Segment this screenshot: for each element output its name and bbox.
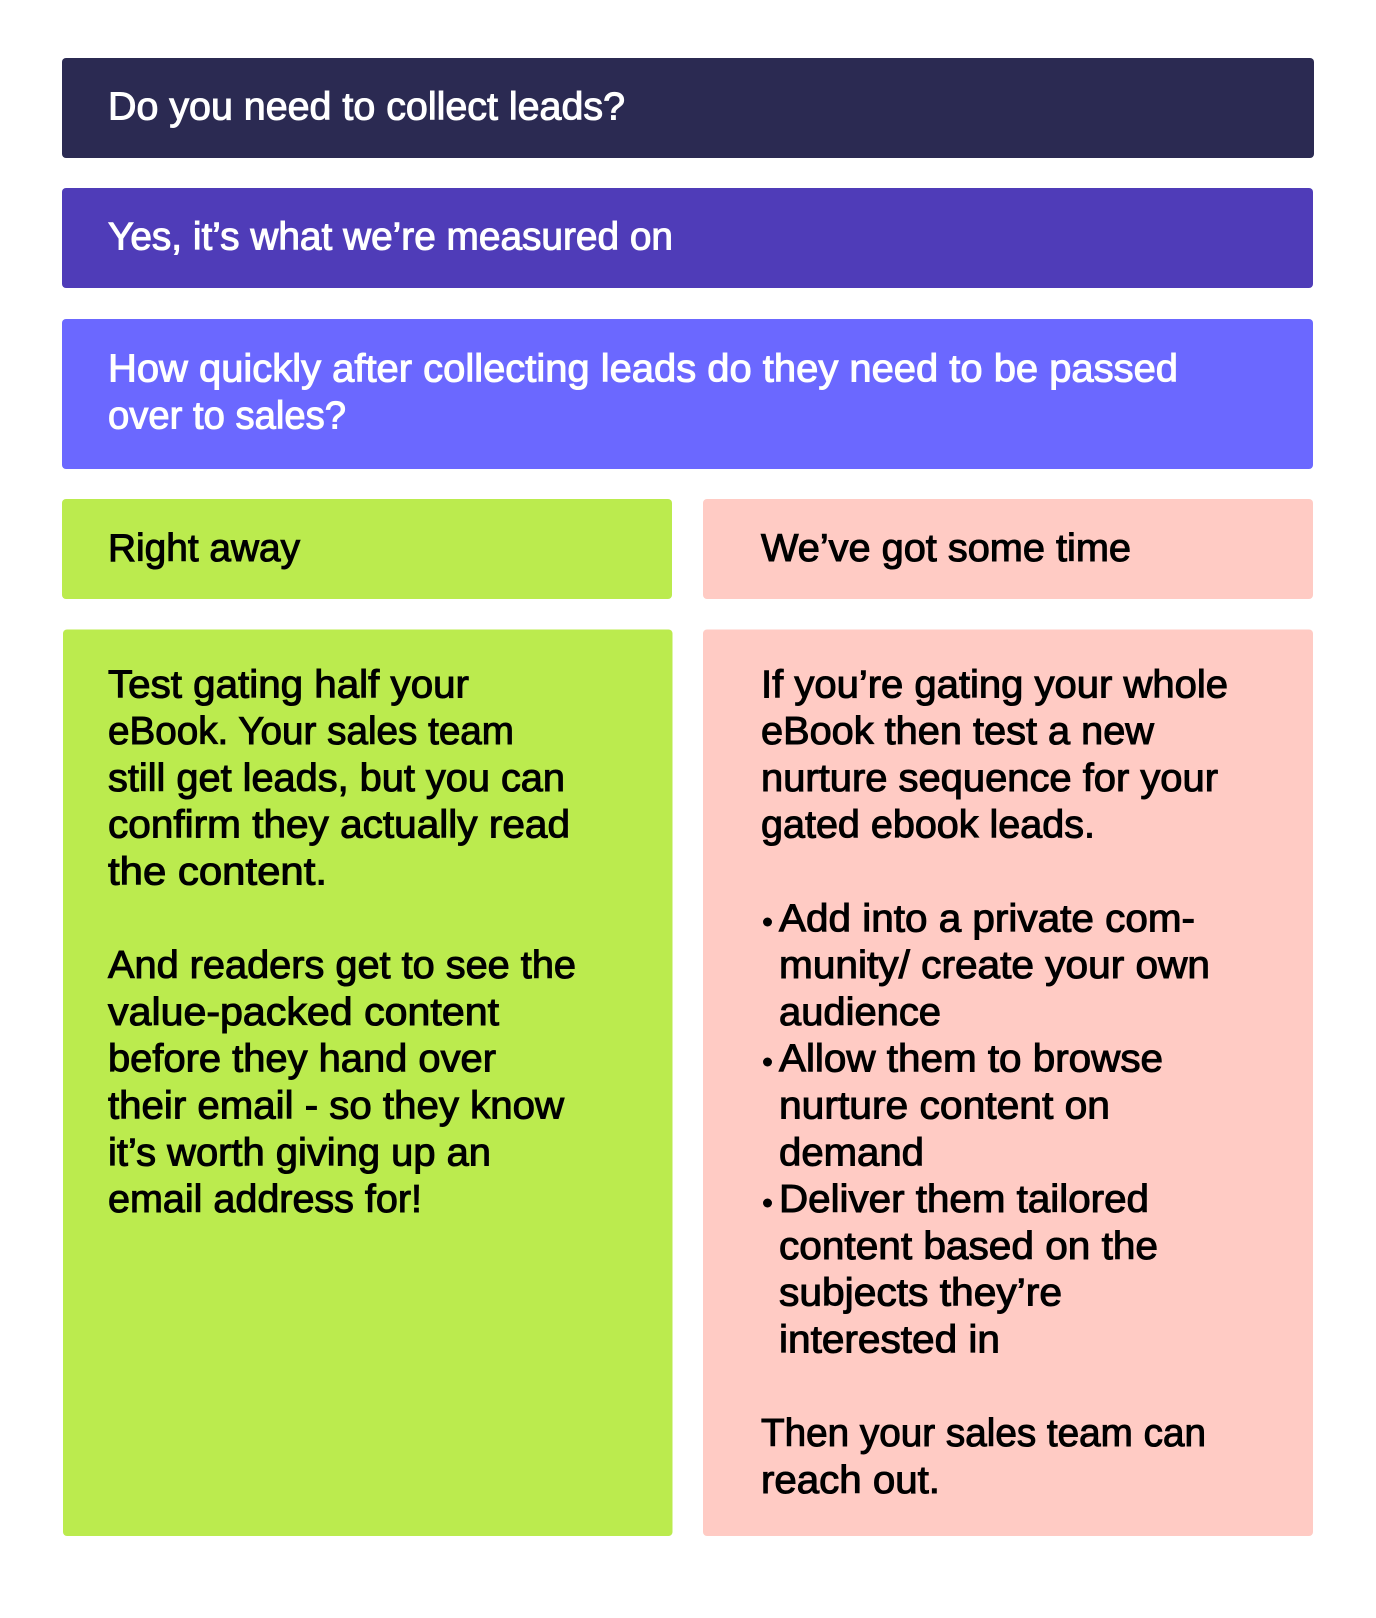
bullet: tailored content <box>763 1178 1158 1362</box>
panel: we've got some time advice <box>703 630 1313 1536</box>
heading continuation: over to sales: over to sales? <box>108 394 346 438</box>
bullet: browse on demand: demand <box>779 1131 924 1174</box>
bullet: private community: munity/ create your own <box>779 944 1210 987</box>
bullet: private community: audience <box>779 991 941 1034</box>
heading: how quickly after collecting leads: How quickly after collecting leads do they need to be passed <box>108 348 1178 391</box>
text block: sales team reach out: reach out. <box>761 1459 940 1502</box>
bullet: tailored content: Deliver them tailored <box>779 1178 1149 1221</box>
option label: right away: Right away <box>108 527 300 570</box>
bullet: tailored content: interested in <box>779 1318 1000 1362</box>
text block: test a nurture sequence: gated ebook leads. <box>761 804 1095 847</box>
heading: yes, it's what we're measured on: Yes, it’s what we’re measured on <box>108 216 673 259</box>
text block: readers see the content first: And readers get to see the <box>108 944 576 987</box>
text block: readers see the content first: their email - so they know <box>108 1084 565 1128</box>
text block: test gating half your ebook: confirm they actually read <box>108 804 570 847</box>
option label: we've got some time: We’ve got some time <box>761 527 1131 570</box>
bullet: private community <box>763 897 1210 1034</box>
text block: test gating half your ebook: the content. <box>108 850 327 894</box>
bullet: private community: Add into a private com- <box>779 897 1195 940</box>
heading: do you need to collect leads: Do you need to collect leads? <box>108 86 625 129</box>
bullet: tailored content: content based on the <box>779 1225 1158 1268</box>
text block: test gating half your ebook <box>108 663 570 894</box>
text block: test gating half your ebook: eBook. Your sales team <box>108 710 514 753</box>
text block: test a nurture sequence: If you’re gating your whole <box>761 663 1228 706</box>
text block: test a nurture sequence: eBook then test a new <box>761 710 1155 753</box>
panel: question, collect leads <box>62 58 1314 158</box>
text block: test a nurture sequence: nurture sequence for your <box>761 757 1218 800</box>
text block: test gating half your ebook: Test gating half your <box>108 663 469 706</box>
text block: test a nurture sequence <box>761 663 1228 847</box>
text block: readers see the content first <box>108 944 576 1221</box>
text block: readers see the content first: value-packed content <box>108 991 499 1034</box>
text block: sales team reach out <box>761 1412 1206 1502</box>
panel: answer, yes <box>62 188 1313 288</box>
panel: option header, we've got some time <box>703 499 1313 599</box>
bullet: tailored content: subjects they’re <box>779 1272 1062 1315</box>
text block: readers see the content first: email address for! <box>108 1178 422 1221</box>
panel: right away advice <box>63 630 672 1536</box>
panel: question, how quickly <box>62 319 1313 469</box>
panel: option header, right away <box>62 499 672 599</box>
text block: sales team reach out: Then your sales team can <box>761 1412 1206 1455</box>
bullet: browse on demand: nurture content on <box>779 1084 1110 1128</box>
text block: readers see the content first: it’s worth giving up an <box>108 1131 491 1174</box>
bullet: browse on demand: Allow them to browse <box>779 1038 1163 1081</box>
text block: readers see the content first: before they hand over <box>108 1038 496 1081</box>
text block: test gating half your ebook: still get leads, but you can <box>108 757 565 800</box>
bullet: browse on demand <box>763 1038 1163 1174</box>
